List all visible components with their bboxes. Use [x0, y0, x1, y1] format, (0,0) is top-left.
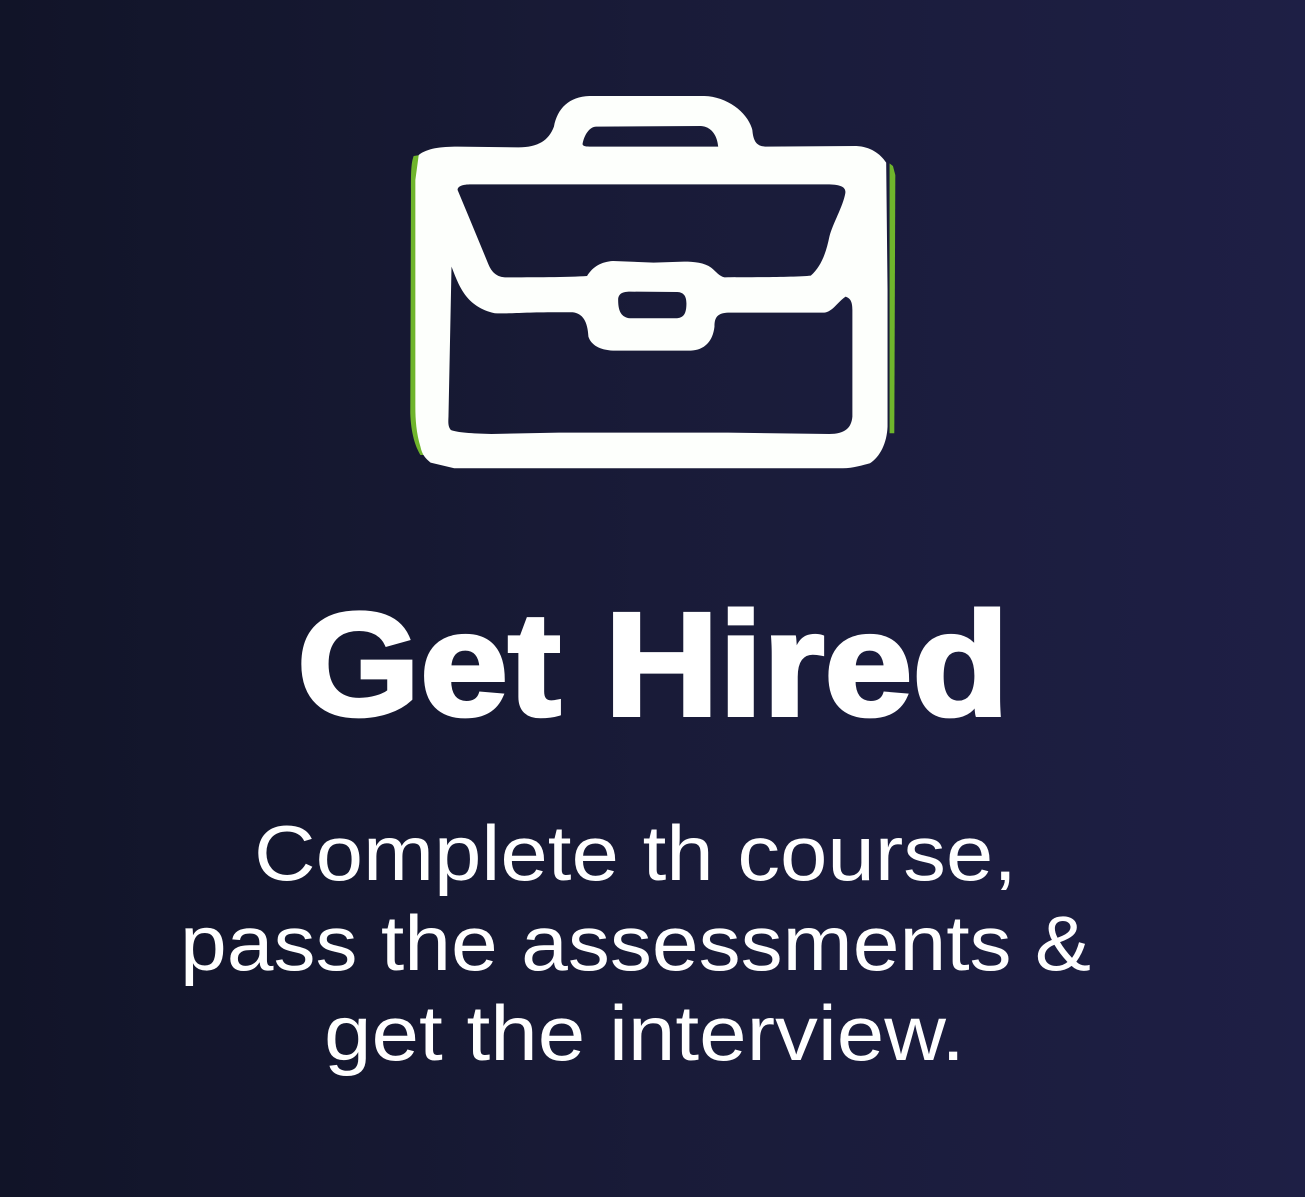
description text: get the interview. — [324, 989, 965, 1077]
description text: pass the assessments & — [180, 899, 1091, 987]
heading: Get Hired — [297, 583, 1009, 747]
description text — [180, 809, 1091, 1077]
description text: Complete th course, — [254, 809, 1017, 897]
icon: briefcase — [410, 96, 895, 468]
